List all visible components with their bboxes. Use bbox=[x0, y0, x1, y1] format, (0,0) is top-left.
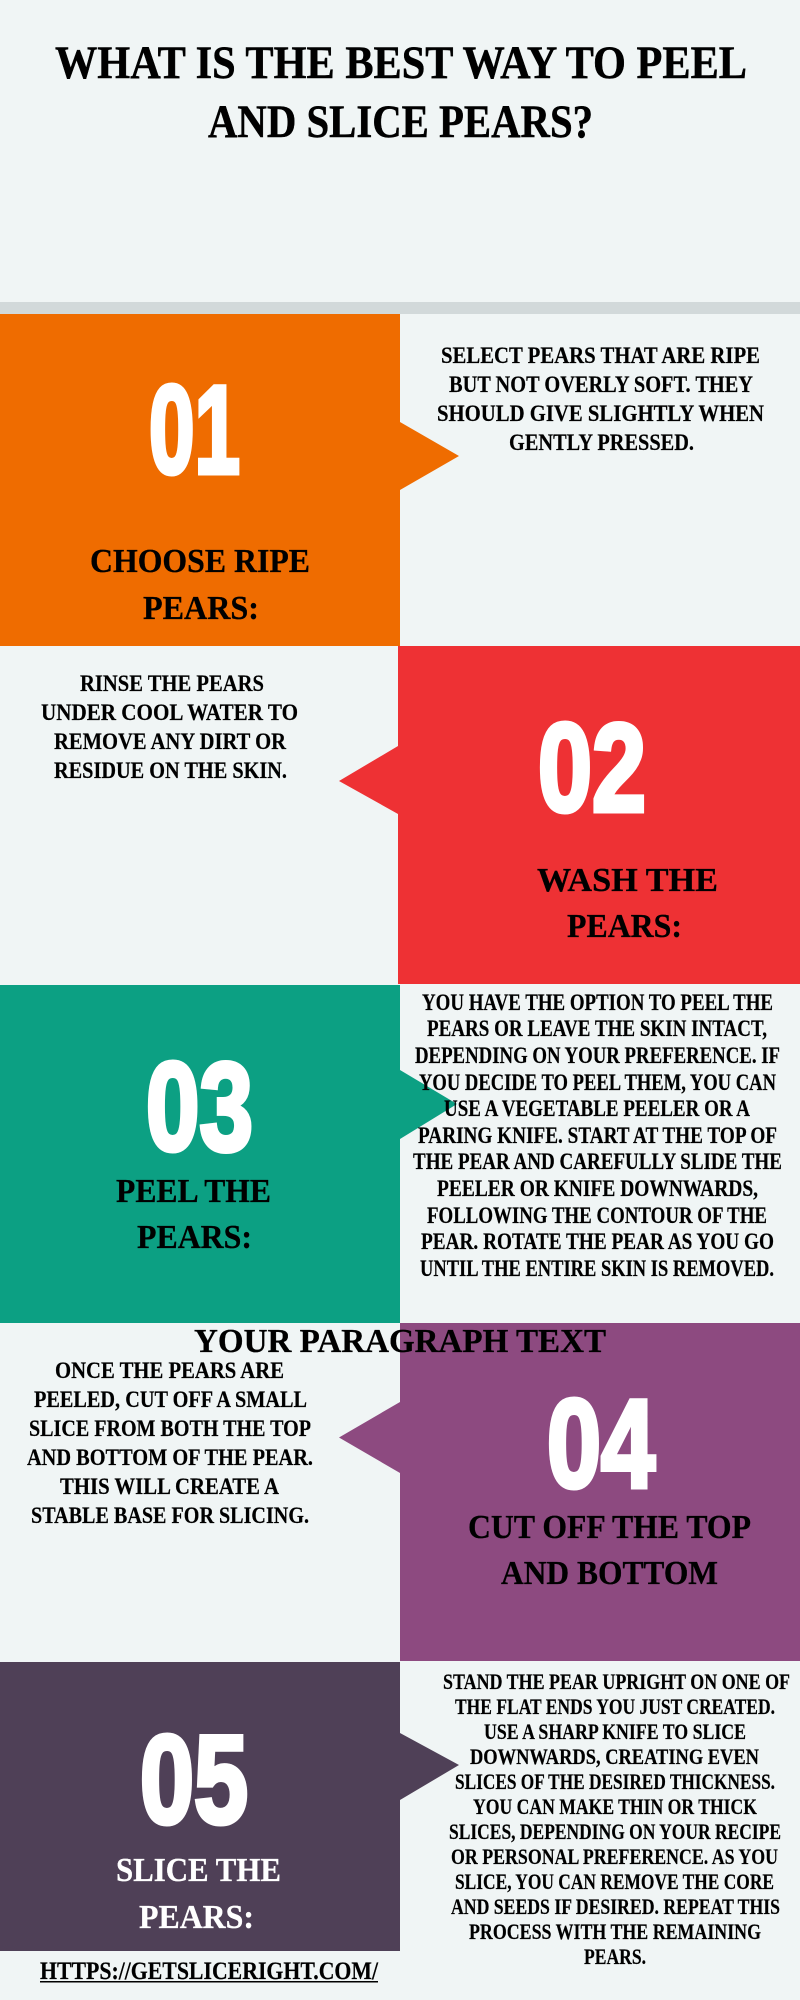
text: step 4 description: ONCE THE PEARS ARE bbox=[55, 1358, 284, 1383]
text: step 4 description bbox=[27, 1358, 313, 1528]
text: step 5 description bbox=[443, 1669, 790, 1969]
heading: cut off the top and bottom bbox=[468, 1509, 751, 1592]
teal block with arrow bbox=[0, 985, 457, 1323]
heading: peel the pears: PEARS: bbox=[137, 1219, 252, 1256]
panel: step 5 slice the pears bbox=[0, 1662, 790, 1969]
text: step 4 description: AND BOTTOM OF THE PEAR. bbox=[27, 1445, 313, 1470]
heading: choose ripe pears: PEARS: bbox=[143, 590, 259, 627]
text: step 2 description: REMOVE ANY DIRT OR bbox=[54, 729, 286, 754]
text: step 5 description: USE A SHARP KNIFE TO SLICE bbox=[484, 1719, 746, 1744]
red block with arrow bbox=[339, 646, 800, 984]
text: step 4 description: PEELED, CUT OFF A SMALL bbox=[34, 1387, 307, 1412]
placeholder heading: your paragraph text: YOUR PARAGRAPH TEXT bbox=[194, 1323, 606, 1360]
text: step 2 description: UNDER COOL WATER TO bbox=[41, 700, 298, 725]
heading: slice the pears bbox=[116, 1852, 281, 1936]
text: step 2 description: RESIDUE ON THE SKIN. bbox=[54, 758, 287, 783]
number 05: 05 bbox=[140, 1711, 248, 1850]
text: step 4 description: THIS WILL CREATE A bbox=[60, 1474, 279, 1499]
heading: choose ripe pears bbox=[90, 543, 310, 627]
number 02: 02 bbox=[538, 699, 646, 838]
heading: cut off the top and bottom: CUT OFF THE TOP bbox=[468, 1509, 751, 1546]
text: step 1 description: SHOULD GIVE SLIGHTLY WHEN bbox=[437, 401, 764, 426]
heading: choose ripe pears: CHOOSE RIPE bbox=[90, 543, 310, 580]
title: AND SLICE PEARS? bbox=[208, 96, 593, 148]
text: step 1 description: GENTLY PRESSED. bbox=[509, 430, 694, 455]
panel: step 2 wash the pears bbox=[41, 646, 800, 984]
heading: peel the pears: PEEL THE bbox=[116, 1173, 271, 1210]
title bbox=[55, 37, 747, 148]
heading: slice the pears: PEARS: bbox=[139, 1899, 254, 1936]
link: website url: HTTPS://GETSLICERIGHT.COM/ bbox=[40, 1958, 379, 1985]
heading: wash the pears bbox=[537, 862, 718, 945]
panel: step 3 peel the pears bbox=[0, 985, 782, 1323]
number 03: 03 bbox=[146, 1038, 253, 1177]
text: step 1 description bbox=[437, 343, 764, 455]
text: step 1 description: BUT NOT OVERLY SOFT. THEY bbox=[449, 372, 753, 397]
text: step 4 description: STABLE BASE FOR SLICING. bbox=[31, 1503, 309, 1528]
text: step 2 description bbox=[41, 671, 298, 783]
heading: peel the pears bbox=[116, 1173, 271, 1256]
text: step 2 description: RINSE THE PEARS bbox=[80, 671, 264, 696]
heading: cut off the top and bottom: AND BOTTOM bbox=[501, 1555, 718, 1592]
orange block with arrow bbox=[0, 314, 459, 646]
panel: step 1 choose ripe pears bbox=[0, 314, 764, 646]
heading: wash the pears: WASH THE bbox=[537, 862, 718, 899]
text: step 4 description: SLICE FROM BOTH THE TOP bbox=[29, 1416, 311, 1441]
dark block with arrow bbox=[0, 1662, 459, 1951]
panel: step 4 cut off the top and bottom bbox=[27, 1323, 800, 1661]
heading: wash the pears: PEARS: bbox=[567, 908, 682, 945]
text: step 3 description bbox=[413, 990, 782, 1281]
number 01: 01 bbox=[149, 361, 240, 500]
heading: slice the pears: SLICE THE bbox=[116, 1852, 281, 1889]
text: step 5 description: PEARS. bbox=[584, 1944, 646, 1969]
purple block with arrow bbox=[339, 1323, 800, 1661]
number 04: 04 bbox=[547, 1375, 655, 1514]
text: step 1 description: SELECT PEARS THAT ARE RIPE bbox=[441, 343, 760, 368]
